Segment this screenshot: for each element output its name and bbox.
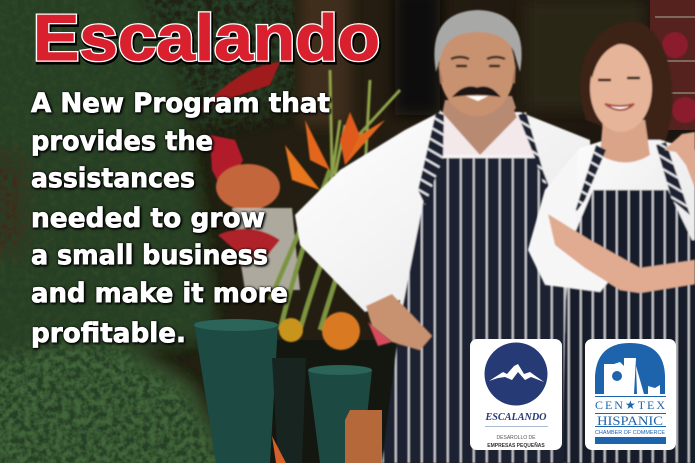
foliage: evergreen shrub: [0, 0, 295, 463]
woman: [528, 22, 695, 463]
logo card: Cen-Tex Hispanic Chamber of Commerce: HISPANIC: [597, 413, 663, 428]
flowers and stems: [195, 62, 400, 350]
title: Escalando: Escalando: [34, 3, 381, 76]
moustache and smile: [456, 88, 497, 95]
text block: program description: and make it more: [31, 278, 288, 309]
icon: mountain emblem: [484, 342, 548, 406]
title: Escalando: Escalando: [33, 1, 380, 74]
woman's neck and face: [600, 120, 650, 162]
hand on hip: [366, 294, 432, 350]
logo tagline: DESAROLLO DE: [497, 435, 536, 441]
apron: [562, 190, 695, 463]
logo tagline: EMPRESAS PEQUEÑAS: [487, 442, 545, 449]
neck: [440, 100, 520, 155]
head: [439, 20, 515, 116]
title: Escalando: Escalando: [33, 1, 380, 74]
man's hand on shoulder: [664, 132, 695, 188]
eyes and smile: [598, 78, 640, 80]
logo tagline: [487, 435, 545, 449]
shirt: [295, 112, 600, 340]
green vases: [194, 319, 382, 463]
apron: [382, 158, 566, 463]
icon: bridge arch emblem: [595, 343, 666, 397]
text block: program description: provides the: [31, 126, 213, 157]
text block: program description: [31, 88, 330, 349]
crossed arms: [528, 150, 625, 292]
woman's body shirt: [528, 140, 695, 312]
logo card: Escalando: [470, 339, 562, 450]
man: [295, 10, 600, 463]
eyes: [451, 57, 505, 59]
hair back: [580, 22, 672, 148]
logo card: Cen-Tex Hispanic Chamber of Commerce: [585, 339, 676, 450]
text block: program description: profitable.: [31, 318, 186, 349]
logo wordmark: CEN★TEX: [595, 398, 665, 412]
text block: program description: assistances: [31, 163, 195, 194]
logo card: Cen-Tex Hispanic Chamber of Commerce: CHAMBER OF COMMERCE: [595, 430, 666, 436]
logo wordmark: ESCALANDO: [484, 412, 546, 423]
text block: program description: needed to grow: [31, 203, 265, 234]
text block: program description: A New Program that: [31, 88, 330, 119]
text block: program description: a small business: [31, 240, 268, 271]
